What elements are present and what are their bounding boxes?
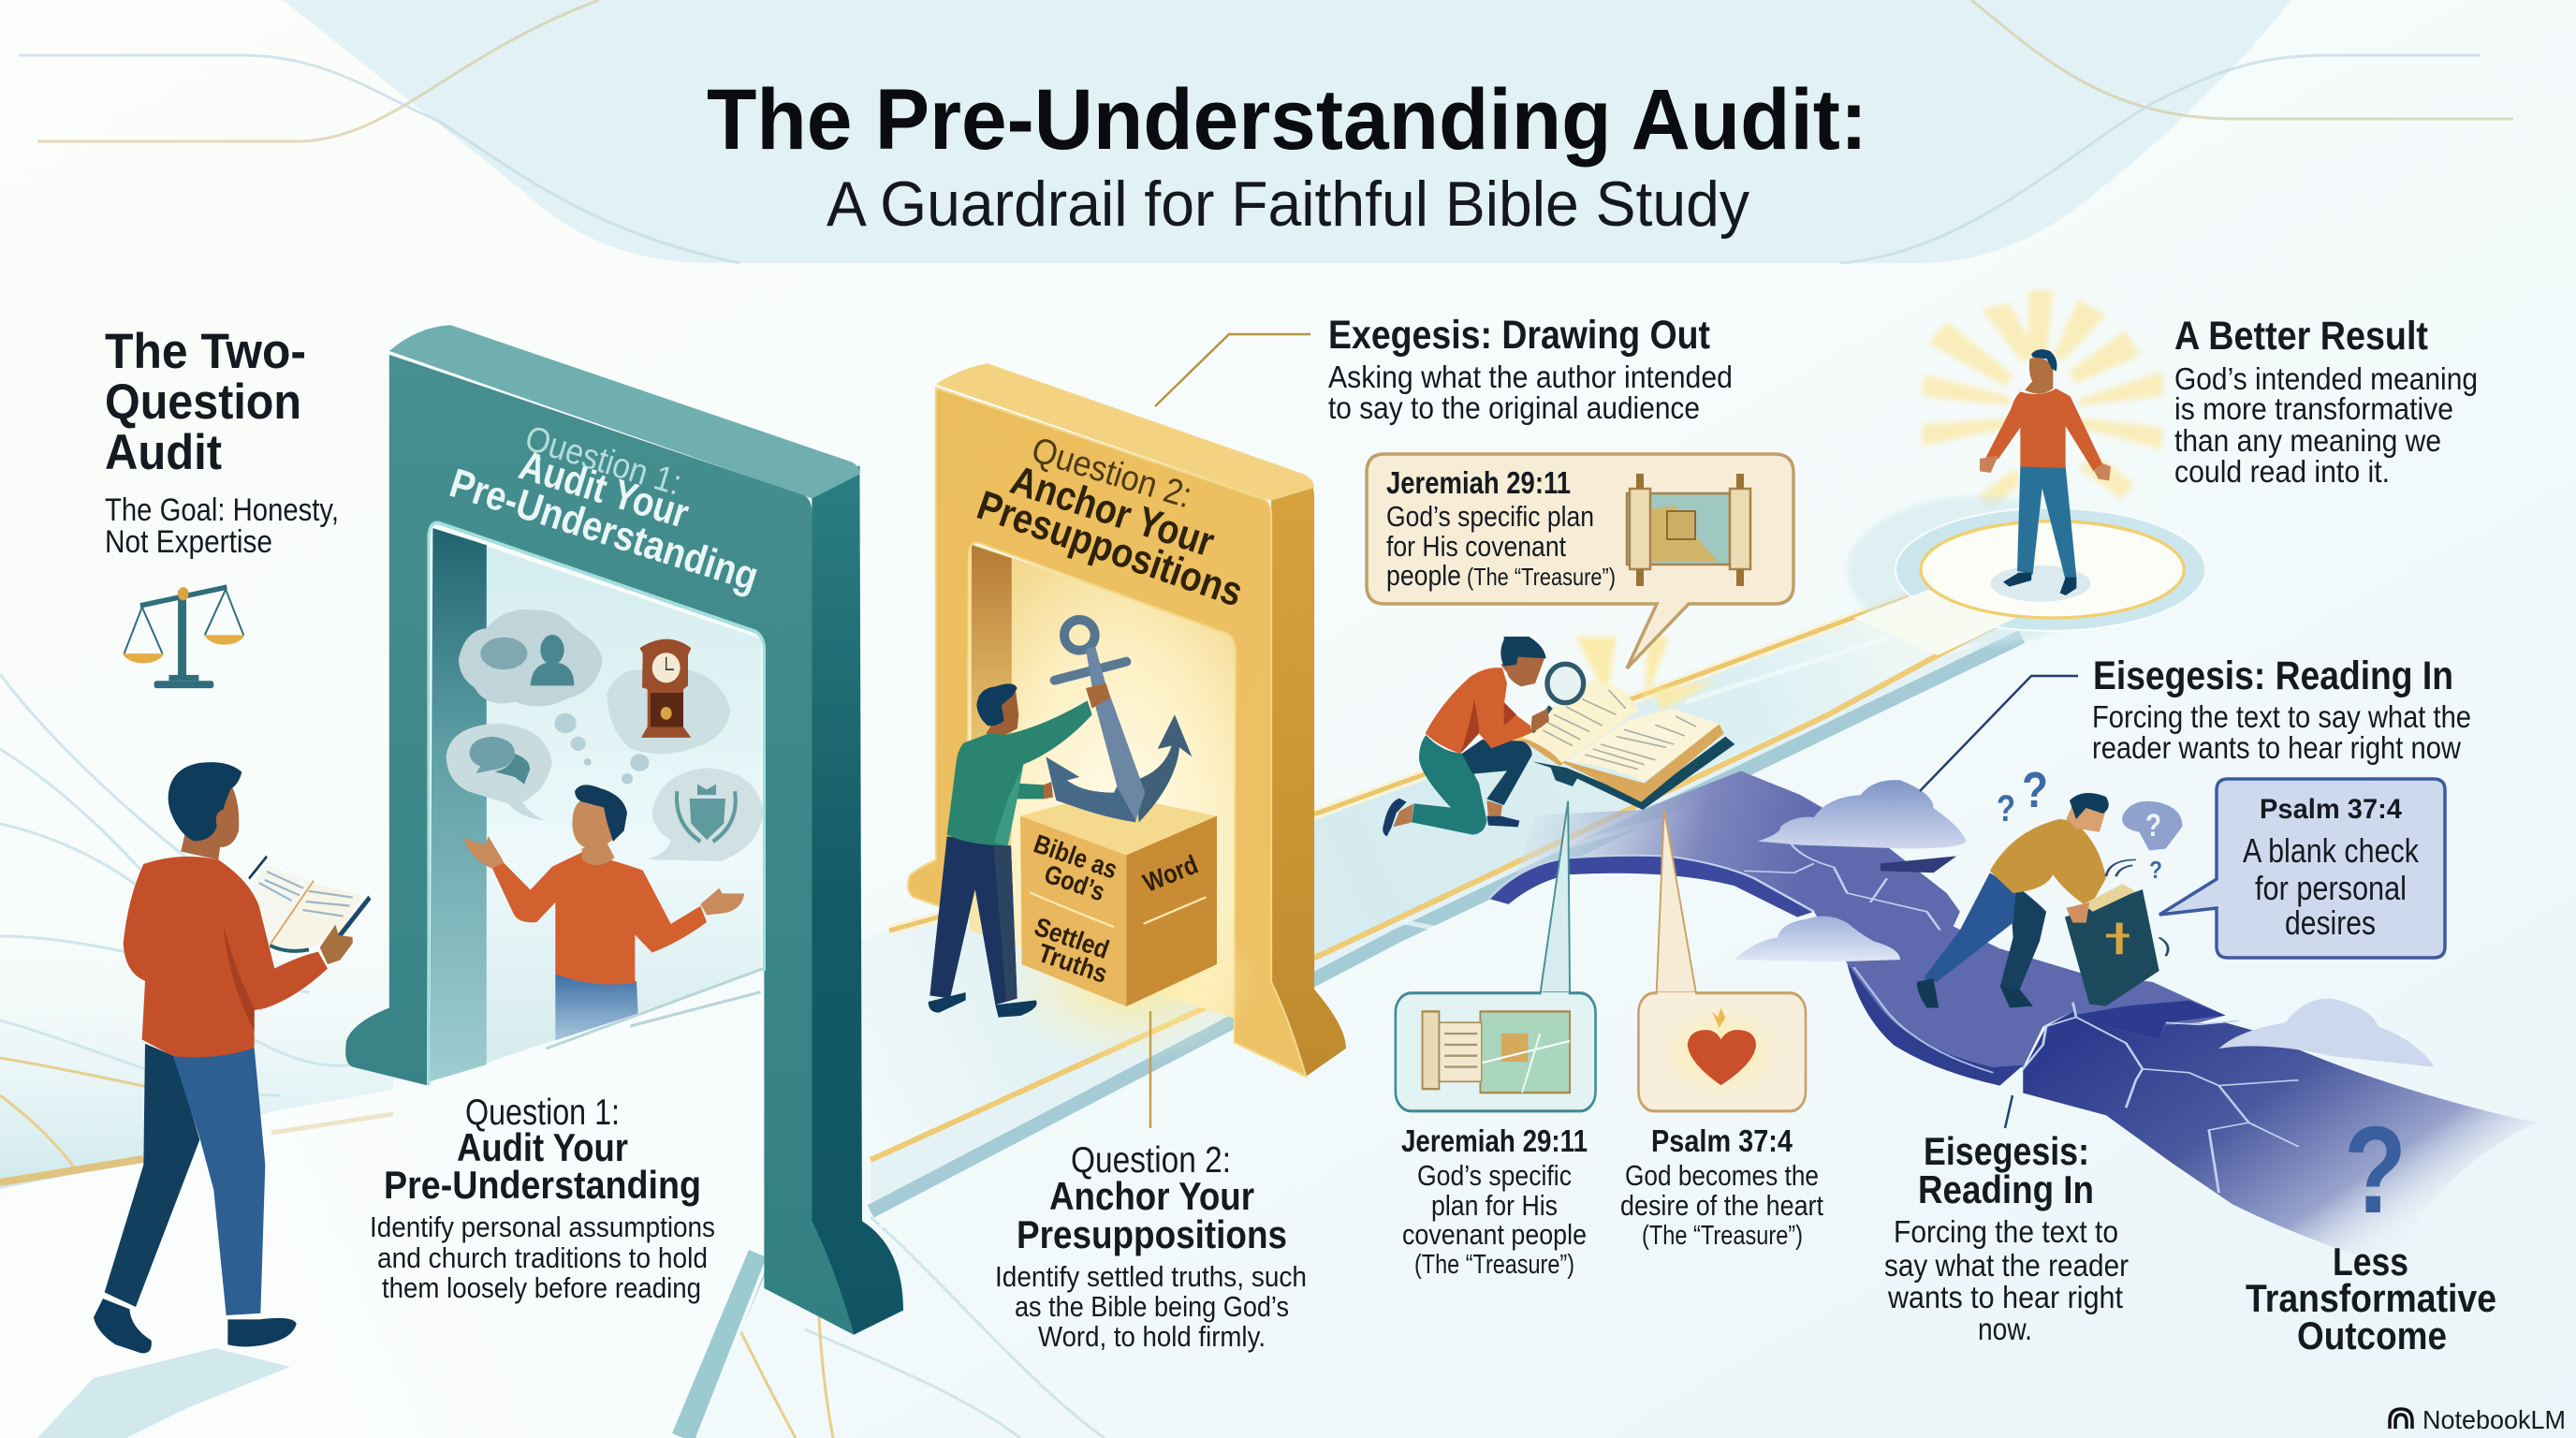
text: jeremiah treasure caption: covenant people [1402, 1218, 1587, 1251]
shirt fold [223, 922, 255, 1031]
psalm callout on cracked path: Psalm 37:4 [2260, 794, 2402, 825]
title: A Guardrail for Faithful Bible Study [827, 169, 1749, 240]
hair [168, 762, 242, 841]
text block: exegesis: Asking what the author intended [1328, 360, 1733, 394]
opening outline [429, 522, 764, 1085]
gold door side face [1266, 480, 1346, 1077]
arched road edge [1488, 856, 1814, 917]
destination circle [1853, 508, 2205, 655]
road: the true exegesis path [0, 590, 2022, 1438]
text block: question 2: Identify settled truths, such [995, 1260, 1307, 1293]
front leg [1462, 740, 1532, 805]
heading: two-question audit: The Two- [105, 324, 306, 379]
text: jeremiah callout: people [1386, 559, 1461, 592]
left page [1523, 679, 1640, 763]
back leg [105, 1044, 199, 1307]
glow around circle [1847, 496, 2109, 646]
text block: less transformative outcome: Outcome [2297, 1313, 2447, 1357]
orange top [1426, 668, 1530, 754]
text block: question 2: Word, to hold firmly. [1038, 1320, 1266, 1353]
text block: a better result: could read into it. [2174, 454, 2390, 489]
motion marks [2106, 859, 2168, 956]
anchor [1046, 620, 1192, 822]
cracks [1744, 844, 2299, 1193]
text block: exegesis: Exegesis: Drawing Out [1328, 313, 1710, 358]
block labels [1031, 829, 1202, 989]
icon: question marks near confused reader [1997, 762, 2162, 884]
panel: gold door [908, 363, 1346, 1077]
person shoes [2003, 573, 2076, 595]
icon: question marks near confused reader: ? [2149, 856, 2162, 884]
icon: question marks near confused reader: ? [1997, 788, 2015, 829]
door sign: question 2: Question 2: [1027, 431, 1196, 516]
text: jeremiah treasure caption: God’s specific [1417, 1159, 1572, 1192]
woman studying the book [1383, 637, 1734, 836]
text block: eisegesis lower: now. [1978, 1312, 2032, 1346]
panel: scales icon [123, 587, 244, 688]
broken slab edge [1847, 963, 2023, 1086]
book glow [1575, 637, 1716, 712]
text block: question 1: and church traditions to hold [377, 1241, 708, 1274]
title [707, 72, 1867, 240]
figure: transformed person on destination circle [1847, 290, 2205, 655]
heading: two-question audit: Not Expertise [105, 524, 272, 560]
text: psalm treasure caption: desire of the heart [1620, 1189, 1823, 1222]
gold door front face [908, 388, 1306, 1077]
text block: question 2 [995, 1140, 1307, 1353]
heading: two-question audit: Audit [105, 425, 222, 480]
title: The Pre-Understanding Audit: [707, 72, 1867, 168]
door sign: question 2 [972, 431, 1249, 616]
psalm callout on cracked path [2159, 779, 2445, 958]
reflected person [463, 785, 744, 1040]
gold door top face [936, 363, 1314, 501]
kneeling back leg [1412, 735, 1486, 835]
thought dots [554, 713, 649, 785]
shoes [94, 1299, 297, 1353]
leader lines [1150, 334, 2078, 1128]
person legs [2017, 466, 2076, 580]
text: jeremiah callout [1386, 465, 1616, 592]
psalm callout on cracked path: desires [2285, 903, 2376, 942]
text block: question 1: Question 1: [465, 1093, 620, 1133]
text block: eisegesis lower: Forcing the text to [1894, 1214, 2118, 1249]
text block: eisegesis lower [1884, 1129, 2129, 1346]
psalm callout on cracked path: A blank check [2243, 831, 2420, 870]
person shirt [1986, 389, 2103, 471]
text block: a better result: God’s intended meaning [2174, 361, 2478, 396]
tear in road [1881, 856, 1956, 873]
icon: big question mark: ? [2344, 1101, 2407, 1239]
text block: question 2: as the Bible being God’s [1015, 1290, 1289, 1323]
thought cloud: clock [607, 639, 730, 754]
text block: question 1: Identify personal assumptions [370, 1211, 715, 1243]
text block: question 2: Presuppositions [1017, 1212, 1287, 1256]
psalm callout on cracked path: for personal [2255, 869, 2407, 907]
text: jeremiah treasure caption [1401, 1123, 1588, 1280]
text block: question 1 [370, 1093, 715, 1304]
storm cloud right [2218, 999, 2435, 1067]
text block: question 1: Audit Your [457, 1125, 628, 1169]
speech bubble [446, 724, 552, 820]
settled truths block [1020, 793, 1217, 1006]
panel: teal door with mirror [345, 325, 903, 1335]
forcing reader [1917, 793, 2159, 1008]
door sign: question 2: Anchor Your [1005, 457, 1220, 565]
road upper surface [1515, 770, 2226, 1067]
heading: two-question audit [105, 324, 339, 560]
foot [1393, 800, 1502, 827]
book page edges [1521, 724, 1724, 802]
raised dark slab [2072, 1001, 2226, 1039]
text block: a better result: A Better Result [2174, 314, 2428, 359]
text block: exegesis: to say to the original audience [1328, 390, 1700, 425]
anchor scene: block, anchor and person [929, 620, 1217, 1018]
head and neck [181, 785, 239, 859]
head [1500, 655, 1544, 686]
block labels: Truths [1034, 938, 1111, 989]
hair bun [1500, 637, 1546, 667]
opening left reveal [430, 528, 487, 1081]
glow at the foot of block [997, 901, 1259, 1064]
door top face [389, 325, 859, 499]
face [2029, 358, 2053, 383]
figure: man reading with book [94, 762, 370, 1353]
text block: a better result: than any meaning we [2174, 423, 2441, 458]
page text lines [1543, 690, 1696, 770]
text block: less transformative outcome: Transformative [2246, 1276, 2496, 1320]
door sign: question 1: Question 1: [520, 418, 686, 504]
text block: eisegesis lower: Eisegesis: [1924, 1129, 2089, 1173]
panel: cracked eisegesis road [1488, 770, 2538, 1267]
door sign: question 1: Pre-Understanding [445, 460, 764, 600]
front leg [173, 1048, 265, 1315]
shoes [1383, 799, 1519, 836]
block labels: Word [1139, 850, 1202, 898]
door front face [345, 355, 854, 1335]
text: jeremiah callout: Jeremiah 29:11 [1386, 465, 1571, 500]
text block: less transformative outcome: Less [2333, 1240, 2408, 1284]
book [249, 857, 370, 951]
person holding anchor [929, 683, 1110, 1018]
church crest bubble [648, 768, 763, 861]
text block: a better result [2174, 314, 2478, 489]
book cover [1532, 737, 1734, 810]
text: psalm treasure caption: (The “Treasure”) [1642, 1221, 1803, 1251]
text block: a better result: is more transformative [2174, 391, 2453, 426]
icon: question marks near confused reader: ? [2145, 808, 2161, 844]
gold door opening [970, 543, 1236, 1019]
text block: question 1: them loosely before reading [382, 1271, 701, 1304]
text: jeremiah treasure caption: (The “Treasure”) [1414, 1250, 1574, 1280]
shirt folds [1460, 699, 1516, 754]
block labels: God’s [1041, 859, 1108, 906]
hands [1980, 456, 2111, 480]
icon: question marks near confused reader: ? [2022, 762, 2048, 818]
text block: eisegesis lower: say what the reader [1884, 1248, 2129, 1283]
heading: two-question audit: The Goal: Honesty, [105, 492, 339, 528]
door opening [430, 528, 761, 1081]
gold opening reveal [972, 545, 1012, 916]
text block: eisegesis upper: Forcing the text to say what the [2092, 699, 2471, 734]
text block: question 2: Anchor Your [1049, 1174, 1254, 1218]
right page [1566, 709, 1720, 782]
lower heart callout [1638, 809, 1806, 1111]
text: jeremiah treasure caption: plan for His [1431, 1189, 1558, 1222]
scroll with map [1627, 474, 1750, 586]
mirror floor line [546, 969, 763, 1049]
mirror scene: thought bubbles and reflected person [446, 609, 763, 1049]
magnifying glass [1532, 664, 1584, 732]
neck [2025, 374, 2053, 393]
thought cloud: person [459, 609, 602, 707]
text: psalm treasure caption [1620, 1123, 1823, 1251]
text: jeremiah callout: (The “Treasure”) [1467, 563, 1616, 591]
lower teal callout [1396, 801, 1596, 1111]
text: jeremiah callout: for His covenant [1386, 530, 1566, 563]
text block: exegesis [1328, 313, 1733, 425]
logo: NotebookLM: NotebookLM [2422, 1405, 2566, 1434]
glow rays [1922, 290, 2162, 508]
door sign: question 2: Presuppositions [972, 482, 1249, 616]
storm cloud lower [1734, 916, 1900, 961]
text block: eisegesis upper: reader wants to hear right now [2092, 730, 2461, 765]
door side face [806, 465, 903, 1335]
block labels: Bible as [1031, 829, 1121, 885]
lower fading road [2023, 1012, 2538, 1267]
hand [1530, 709, 1549, 733]
text block: eisegesis upper: Eisegesis: Reading In [2093, 653, 2453, 698]
text: jeremiah callout: God’s specific plan [1386, 500, 1594, 533]
confused thought smudge [2122, 801, 2182, 851]
hair [2031, 349, 2056, 372]
callouts: verse boxes [1396, 801, 1806, 1111]
jeremiah speech callout [1367, 454, 1793, 668]
text block: question 1: Pre-Understanding [384, 1163, 701, 1207]
text block: eisegesis lower: Reading In [1918, 1167, 2094, 1211]
block labels: Settled [1031, 912, 1113, 964]
door sign: question 1 [445, 418, 764, 600]
text: psalm treasure caption: God becomes the [1625, 1159, 1819, 1192]
text block: eisegesis upper [2092, 653, 2471, 765]
text: psalm treasure caption: Psalm 37:4 [1651, 1123, 1793, 1158]
hand [320, 925, 353, 964]
storm cloud upper [1758, 780, 1967, 849]
text block: less transformative outcome [2246, 1240, 2496, 1357]
text: jeremiah treasure caption: Jeremiah 29:11 [1401, 1123, 1588, 1158]
text block: question 2: Question 2: [1071, 1140, 1231, 1181]
door sign: question 1: Audit Your [514, 443, 694, 537]
heading: two-question audit: Question [105, 374, 301, 430]
text block: eisegesis lower: wants to hear right [1887, 1280, 2123, 1314]
shirt [124, 857, 328, 1057]
